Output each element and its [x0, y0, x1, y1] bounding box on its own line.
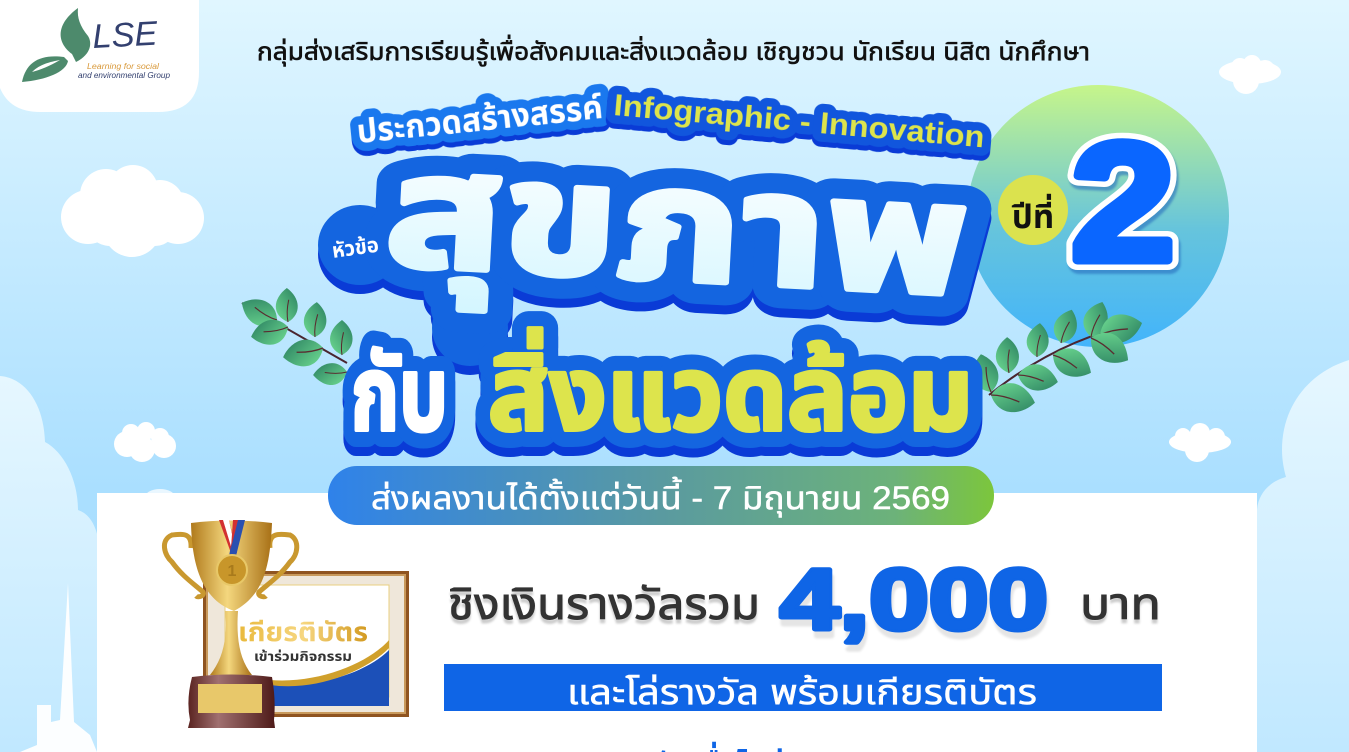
logo wordmark: LSE [91, 15, 159, 56]
title word: with: กับ [351, 337, 448, 453]
title word: environment: สิ่งแวดล้อม [488, 328, 973, 453]
certificate subtitle: เข้าร่วมกิจกรรม [254, 649, 352, 664]
logo tagline: Learning for social [87, 62, 159, 71]
date pill: ส่งผลงานได้ตั้งแต่วันนี้ - 7 มิถุนายน 2569 [371, 476, 950, 517]
year badge [998, 175, 1068, 245]
logo tagline: and environmental Group [78, 71, 171, 80]
branch left [236, 288, 353, 387]
contest heading latin: Infographic - Innovation [612, 87, 986, 154]
logo tagline [78, 62, 171, 80]
cloud mid-left [114, 422, 176, 462]
white content panel [97, 493, 1257, 752]
logo leaves [22, 8, 90, 82]
trophy [164, 520, 297, 728]
ribbon [219, 520, 245, 556]
certificate [203, 571, 409, 717]
year number: 2 [1071, 108, 1175, 296]
header line: กลุ่มส่งเสริมการเรียนรู้เพื่อสังคมและสิ่งแวดล้อม เชิญชวน นักเรียน นิสิต นักศึกษา [257, 34, 1090, 67]
certificate title: เกียรติบัตร [238, 617, 368, 647]
prize unit: บาท [1080, 580, 1161, 629]
small cloud behind panel [145, 489, 175, 505]
cloud mid-right [1169, 423, 1231, 462]
label topic: หัวข้อ [330, 234, 380, 263]
medal [217, 555, 247, 585]
title word: health: สุขภาพ [381, 123, 972, 336]
logo card [0, 0, 199, 112]
branch right [968, 298, 1146, 416]
banner [444, 664, 1162, 712]
cloud top-left [61, 165, 204, 257]
banner: และโล่รางวัล พร้อมเกียรติบัตร [567, 673, 1037, 712]
prize amount: 4,000 [780, 552, 1048, 648]
contest heading thai: ประกวดสร้างสรรค์ [355, 88, 604, 150]
year circle [967, 85, 1229, 347]
medal: 1 [228, 563, 237, 580]
year number: 2 [1071, 108, 1175, 296]
large cloud right [1257, 360, 1349, 752]
title word: with: กับ [351, 337, 448, 453]
trophy stem [210, 611, 252, 675]
prize label: ชิงเงินรางวัลรวม [448, 580, 760, 629]
title word: health [318, 123, 972, 366]
trophy base [188, 674, 275, 728]
trophy cup [191, 520, 272, 611]
title word: environment: สิ่งแวดล้อม [488, 328, 973, 453]
year badge: ปีที่ [1011, 193, 1054, 235]
cloud top-right [1219, 55, 1281, 94]
trophy handles [164, 534, 297, 597]
title word: health: สุขภาพ [381, 123, 972, 336]
city skyline silhouette [20, 583, 97, 752]
large cloud left [0, 376, 100, 752]
date pill [328, 466, 994, 525]
